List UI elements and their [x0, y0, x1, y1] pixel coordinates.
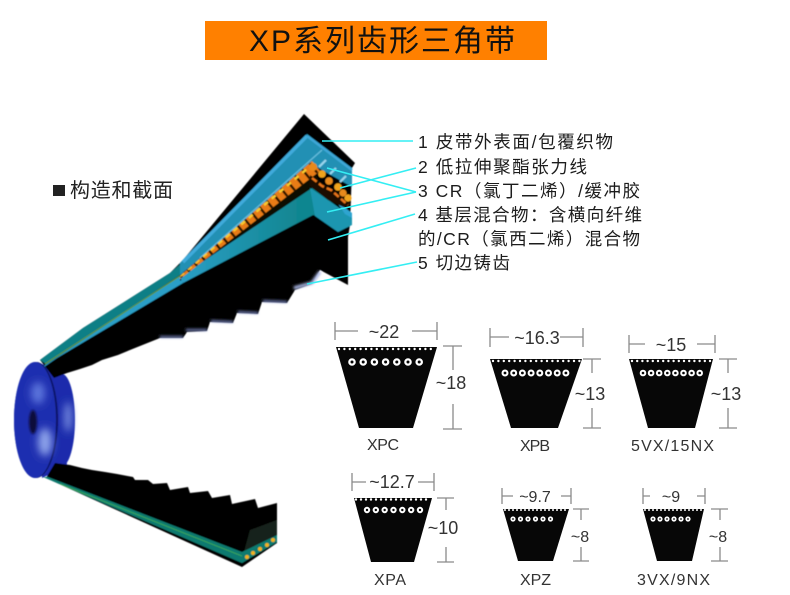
title banner: XP系列齿形三角带 [249, 25, 515, 58]
cross-section: XPZ: ~9.7 [519, 489, 551, 506]
section heading: structure and cross-section: 构造和截面 [70, 179, 173, 202]
pulley [14, 362, 75, 478]
cross-section: XPA: XPA [374, 572, 406, 589]
cross-section: XPB: ~16.3 [514, 328, 560, 348]
cross-section: XPC: ~22 [369, 322, 399, 342]
upper belt run [40, 114, 355, 378]
cross-section: XPA: ~12.7 [369, 472, 415, 492]
cross-section: XPZ: XPZ [520, 572, 551, 589]
cross-section: XPA [352, 472, 458, 589]
callout labels: 2 低拉伸聚酯张力线 [418, 157, 587, 177]
title banner [205, 21, 547, 60]
tension cord [180, 161, 320, 279]
cross-section: 5VX/15NX: ~13 [711, 384, 741, 404]
cross-section: 5VX/15NX: ~15 [656, 335, 686, 355]
cross-section: XPB: ~13 [575, 384, 605, 404]
callout labels: 1 皮带外表面/包覆织物 [418, 132, 613, 152]
callout labels: 的/CR（氯西二烯）混合物 [418, 229, 640, 249]
cross-section: 3VX/9NX: ~9 [662, 489, 680, 506]
cross-section: 5VX/15NX: 5VX/15NX [631, 438, 714, 455]
cross-section: XPC: ~18 [436, 373, 466, 393]
callout labels: 4 基层混合物：含横向纤维 [418, 205, 642, 225]
cross-section: XPA: ~10 [428, 518, 458, 538]
cross-section: XPC: XPC [367, 437, 399, 454]
cross-section: 3VX/9NX: ~8 [709, 529, 727, 546]
callout labels: 3 CR（氯丁二烯）/缓冲胶 [418, 181, 640, 201]
cross-section: XPZ [502, 488, 589, 589]
illustration: toothed belt around pulley [14, 114, 355, 567]
cross-section: XPB [490, 328, 605, 455]
cross-section: XPB: XPB [520, 438, 550, 455]
cord ends [309, 163, 352, 209]
callout leader lines [307, 141, 417, 284]
callout labels [418, 132, 642, 273]
cross-section: 5VX/15NX [629, 335, 741, 455]
cross-section: 3VX/9NX: 3VX/9NX [637, 572, 710, 589]
cross-section: XPC [335, 322, 466, 454]
lower belt run [43, 463, 277, 567]
cross-section: XPZ: ~8 [571, 529, 589, 546]
callout labels: 5 切边铸齿 [418, 253, 510, 273]
cross-section: 3VX/9NX [637, 488, 728, 589]
